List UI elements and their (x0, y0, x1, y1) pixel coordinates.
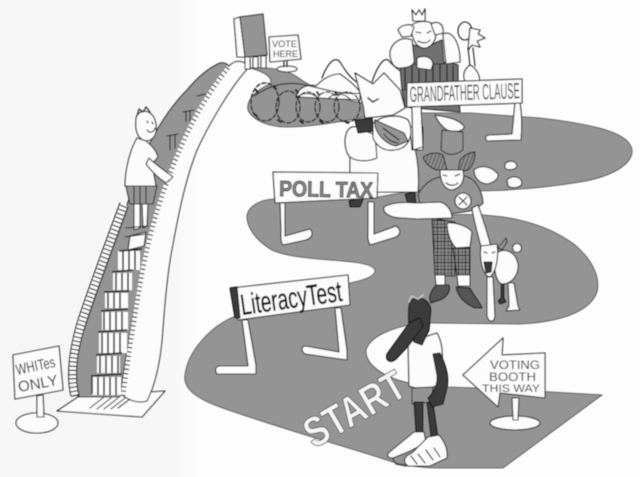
Voting Booth This Way arrow sign: BOOTH (489, 370, 536, 384)
white man on escalator (125, 107, 173, 250)
Voting Booth This Way arrow sign (463, 338, 545, 430)
white right rail (120, 61, 248, 402)
Whites Only sign (13, 346, 63, 433)
plaid pants figure (384, 152, 522, 308)
escalator (57, 61, 248, 417)
base mat (57, 391, 165, 417)
Vote Here sign: VOTE (272, 39, 297, 49)
legs below sign (402, 84, 460, 112)
Whites Only sign: ONLY (17, 372, 59, 396)
gray moving belt (75, 63, 229, 397)
right hatched edge (123, 67, 229, 396)
Literacy Test sign: LiteracyTest (239, 276, 344, 322)
poodle dog (480, 238, 522, 321)
dangling chicken on chain (458, 22, 472, 40)
Poll Tax sign (273, 172, 400, 245)
puffs of smoke (474, 167, 498, 184)
Literacy Test sign (216, 275, 350, 374)
Grandfather Clause sign (407, 78, 522, 150)
grandfather figure (390, 9, 485, 154)
Vote Here sign (269, 35, 301, 72)
Vote Here sign: HERE (273, 49, 298, 59)
START painted on road: START (295, 361, 414, 457)
step rows (92, 251, 140, 395)
Black voter figure (387, 295, 448, 466)
Voting Booth This Way arrow sign: VOTING (490, 358, 540, 372)
barbed wire and mounds (251, 60, 362, 123)
left hatched rail (73, 205, 124, 396)
Voting Booth This Way arrow sign: THIS WAY (482, 383, 541, 395)
winding gray road (185, 113, 632, 468)
Poll Tax sign: POLL TAX (279, 176, 374, 203)
Whites Only sign: WHITes (14, 354, 57, 379)
upper road behind barbed wire (248, 68, 365, 127)
voting booth (234, 14, 267, 69)
hooded figure with pistol (345, 60, 423, 207)
